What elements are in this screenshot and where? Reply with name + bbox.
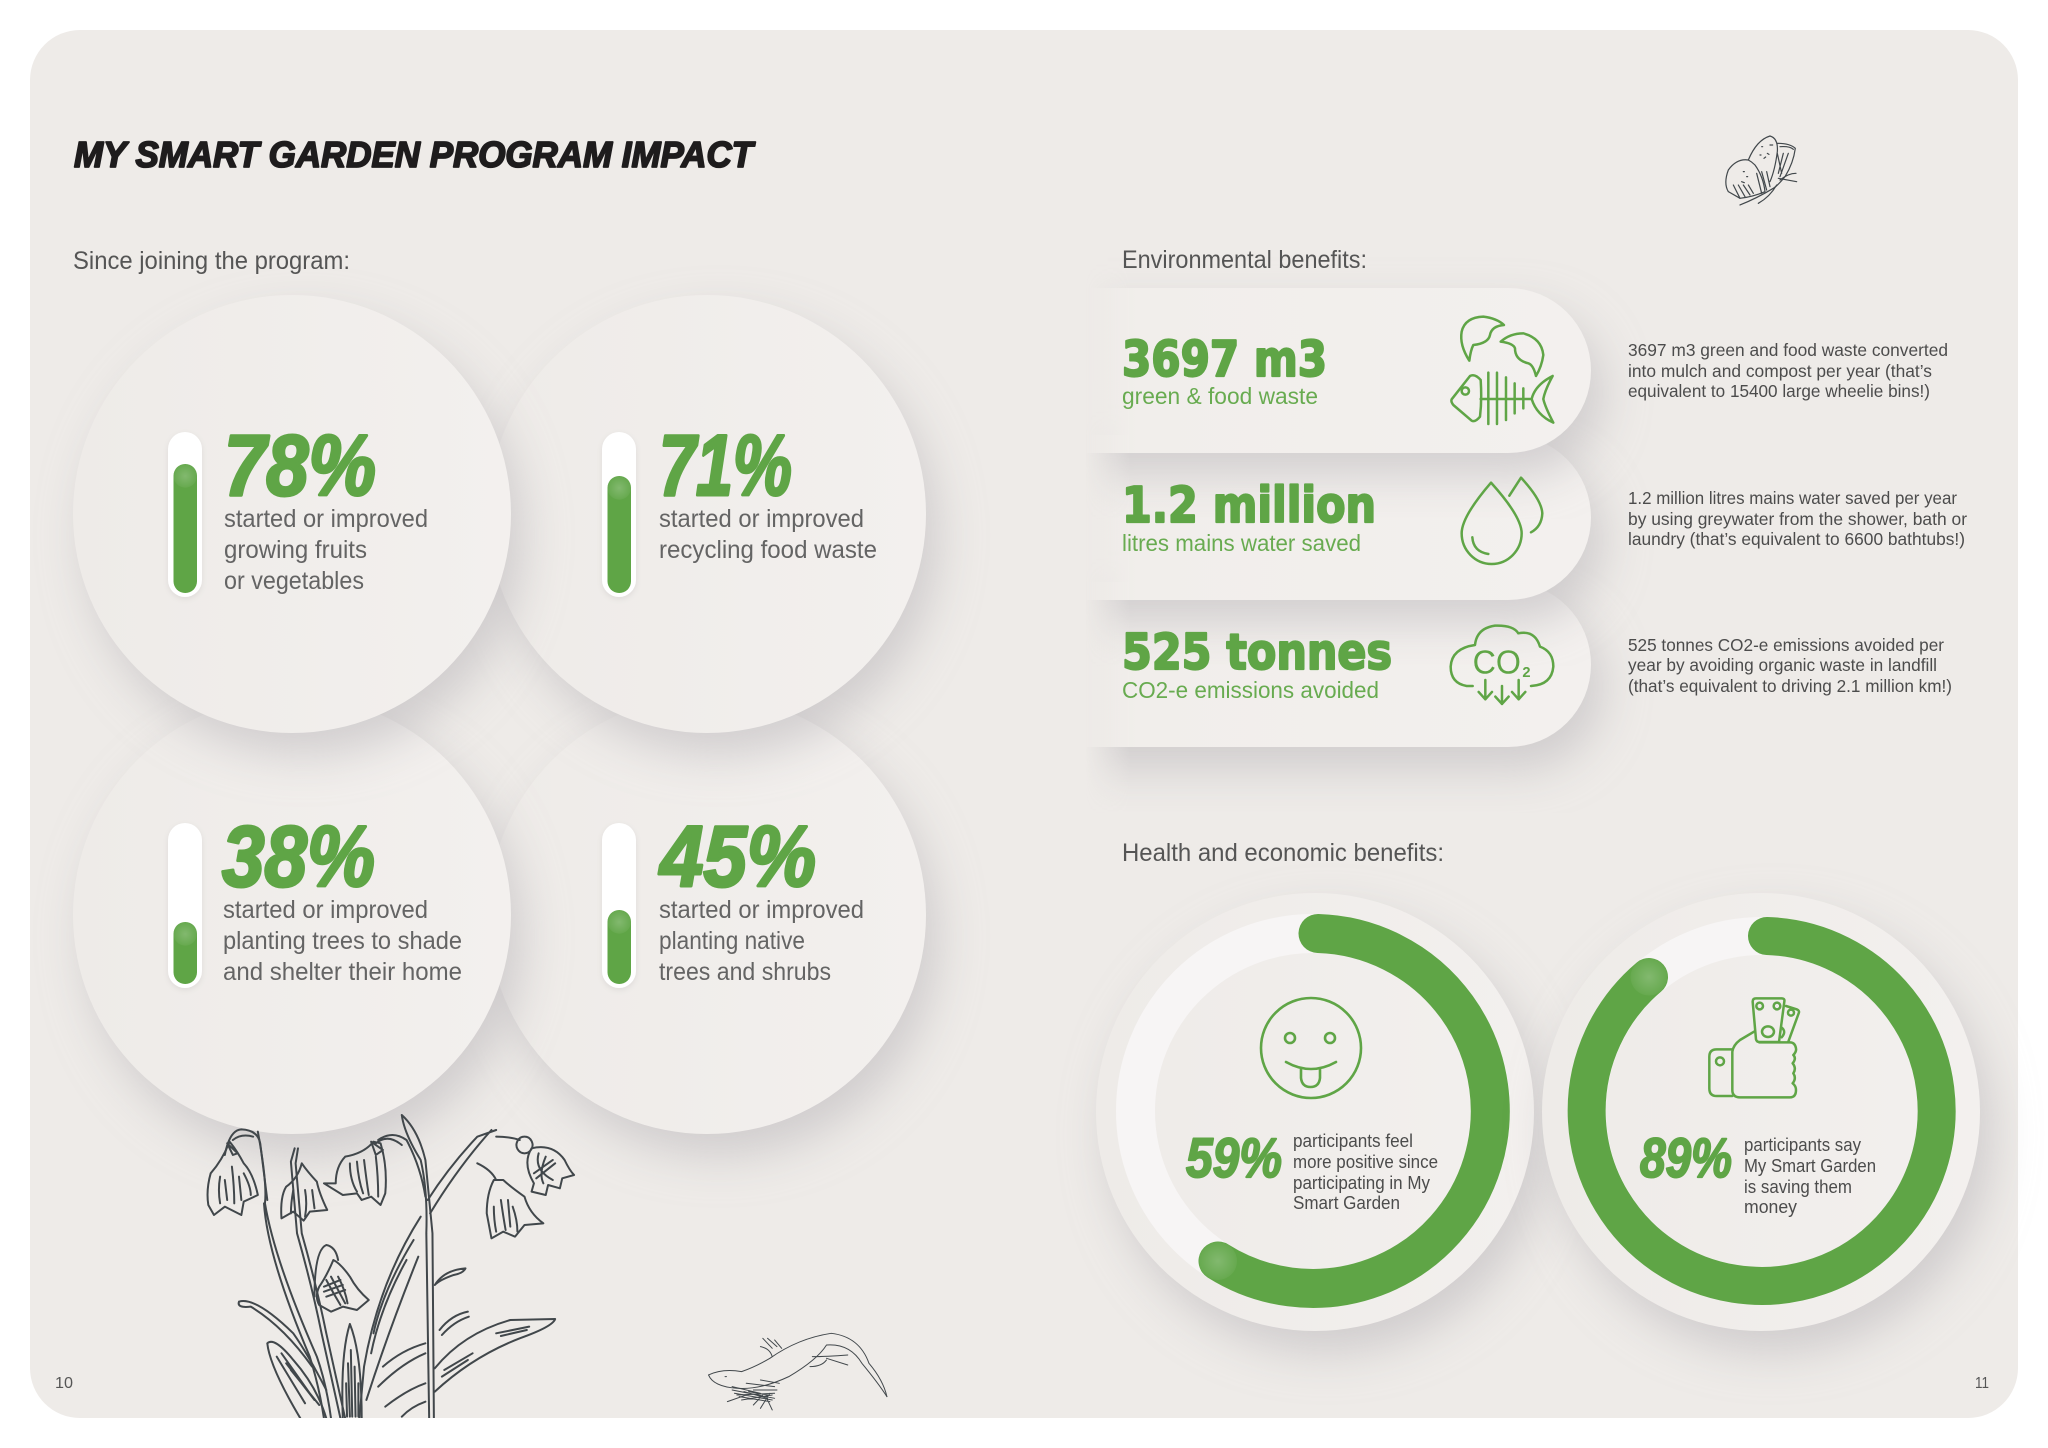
- description 89: money: [1744, 1197, 1797, 1217]
- description 59: participants feel: [1293, 1131, 1413, 1151]
- illustration: lizard: [709, 1333, 887, 1410]
- stat: CO2 avoided: CO2-e emissions avoided: [1122, 677, 1379, 703]
- description 89: My Smart Garden: [1744, 1156, 1876, 1176]
- illustration: butterfly: [1726, 136, 1797, 205]
- note: water detail: [1628, 488, 1967, 549]
- title: MY SMART GARDEN PROGRAM IMPACT: [74, 134, 756, 175]
- donut chart 59: [1136, 934, 1490, 1288]
- panel: water pill: [1000, 435, 1591, 600]
- stat: water saved: litres mains water saved: [1122, 530, 1361, 556]
- stat: 38 percent: [168, 809, 462, 988]
- page number right: 11: [1975, 1375, 1989, 1392]
- description 78: growing fruits: [224, 536, 367, 564]
- note: CO2 detail: year by avoiding organic waste in landfill: [1628, 655, 1937, 675]
- stat: green and food waste: 3697 m3: [1122, 331, 1327, 388]
- description 45: trees and shrubs: [659, 958, 831, 986]
- note: water detail: laundry (that’s equivalent to 6600 bathtubs!): [1628, 529, 1965, 549]
- description 38: started or improved: [223, 896, 428, 924]
- panel: CO2 pill: [1000, 582, 1591, 747]
- panel: 78 percent circle: [73, 295, 511, 733]
- description 38: [223, 896, 462, 986]
- note: waste detail: into mulch and compost per year (that’s: [1628, 361, 1932, 381]
- progress bar 71: [602, 432, 636, 597]
- description 59: Smart Garden: [1293, 1193, 1400, 1213]
- description 59: more positive since: [1293, 1152, 1438, 1172]
- heading: environmental benefits: Environmental benefits:: [1122, 246, 1367, 274]
- note: waste detail: 3697 m3 green and food waste converted: [1628, 340, 1948, 360]
- note: water detail: by using greywater from the shower, bath or: [1628, 509, 1967, 529]
- stat: water saved: [1122, 477, 1376, 556]
- description 78: [224, 505, 428, 595]
- stat: CO2 avoided: 525 tonnes: [1122, 624, 1392, 681]
- value 78: 78%: [224, 418, 376, 514]
- illustration: snowdrop flowers: [208, 1115, 574, 1418]
- note: waste detail: equivalent to 15400 large wheelie bins!): [1628, 381, 1930, 401]
- description 78: or vegetables: [224, 567, 364, 595]
- panel: 71 percent circle: [488, 295, 926, 733]
- description 89: participants say: [1744, 1135, 1861, 1155]
- stat: CO2 avoided: [1122, 624, 1392, 703]
- stat: 45 percent: [602, 809, 864, 988]
- description 78: started or improved: [224, 505, 428, 533]
- icon: egg shells and fish bone: [1451, 317, 1553, 424]
- description 89: is saving them: [1744, 1177, 1852, 1197]
- icon: water drops: [1462, 478, 1542, 564]
- description 59: [1293, 1131, 1438, 1213]
- description 45: [659, 896, 864, 986]
- value 59: 59%: [1186, 1126, 1282, 1189]
- stat: 78 percent: [168, 418, 428, 597]
- page number left: 10: [55, 1375, 73, 1392]
- stat: green and food waste: green & food waste: [1122, 383, 1318, 409]
- progress bar 45: [602, 823, 636, 988]
- description 38: and shelter their home: [223, 958, 462, 986]
- stat: water saved: 1.2 million: [1122, 477, 1376, 534]
- note: CO2 detail: 525 tonnes CO2-e emissions avoided per: [1628, 635, 1944, 655]
- icon: smiley with tongue: [1261, 998, 1361, 1098]
- value 71: 71%: [659, 418, 792, 514]
- panel: 45 percent circle: [488, 696, 926, 1134]
- description 71: recycling food waste: [659, 536, 877, 564]
- progress bar 38: [168, 823, 202, 988]
- description 45: planting native: [659, 927, 805, 955]
- description 71: [659, 505, 877, 564]
- icon: CO2 cloud: CO: [1473, 644, 1521, 681]
- panel: 38 percent circle: [73, 696, 511, 1134]
- icon: CO2 cloud: [1451, 626, 1553, 704]
- note: CO2 detail: [1628, 635, 1952, 696]
- note: waste detail: [1628, 340, 1948, 401]
- heading: since joining: Since joining the program:: [73, 247, 350, 275]
- description 89: [1744, 1135, 1876, 1217]
- heading: health and economic benefits: Health and economic benefits:: [1122, 839, 1444, 867]
- description 45: started or improved: [659, 896, 864, 924]
- note: water detail: 1.2 million litres mains water saved per year: [1628, 488, 1957, 508]
- panel: waste pill: [1000, 288, 1591, 453]
- description 59: participating in My: [1293, 1173, 1430, 1193]
- progress bar 78: [168, 432, 202, 597]
- description 71: started or improved: [659, 505, 864, 533]
- stat: green and food waste: [1122, 331, 1327, 409]
- panel: 59 percent donut: [1096, 893, 1534, 1331]
- stat: 71 percent: [602, 418, 877, 597]
- description 38: planting trees to shade: [223, 927, 462, 955]
- panel: 89 percent donut: [1542, 893, 1980, 1331]
- note: CO2 detail: (that’s equivalent to driving 2.1 million km!): [1628, 676, 1952, 696]
- donut chart 89: [1587, 936, 1937, 1286]
- icon: hand holding money: [1709, 998, 1799, 1097]
- value 45: 45%: [658, 809, 816, 905]
- value 38: 38%: [222, 809, 375, 905]
- icon: CO2 cloud: 2: [1522, 665, 1530, 681]
- value 89: 89%: [1640, 1126, 1732, 1189]
